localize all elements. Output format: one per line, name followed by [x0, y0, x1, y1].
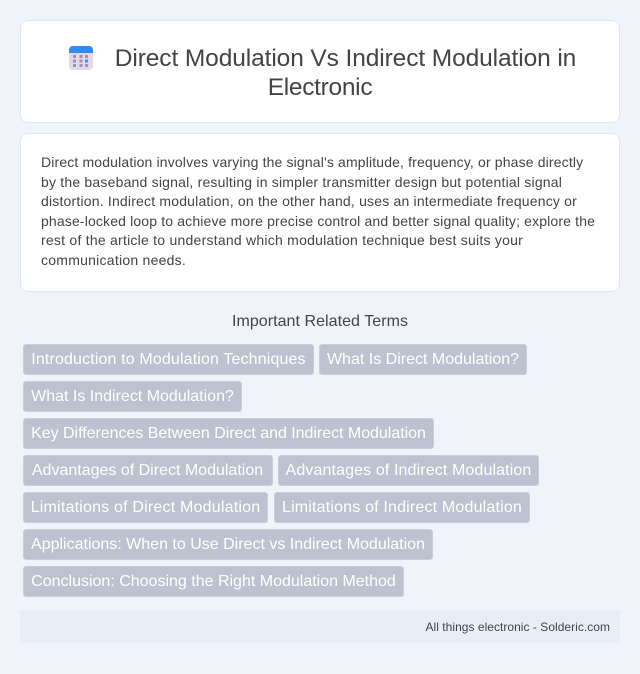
- icon: calendar: [69, 46, 93, 70]
- tag: Conclusion: Choosing the Right Modulation Method: [31, 573, 396, 590]
- tag: [23, 455, 273, 486]
- header card: [20, 20, 620, 123]
- heading: related terms: Important Related Terms: [232, 313, 408, 330]
- summary card: [20, 133, 620, 292]
- summary text: communication needs.: [41, 252, 186, 268]
- title: Electronic: [268, 74, 372, 101]
- tag: [23, 566, 404, 597]
- tag: [23, 492, 268, 523]
- tag: Limitations of Indirect Modulation: [282, 499, 522, 516]
- tag: What Is Direct Modulation?: [327, 351, 519, 368]
- tag: Applications: When to Use Direct vs Indirect Modulation: [31, 536, 425, 553]
- tag: [274, 492, 530, 523]
- footer bar: [20, 610, 620, 643]
- title: Direct Modulation Vs Indirect Modulation in: [115, 45, 576, 72]
- tag: Introduction to Modulation Techniques: [31, 351, 306, 368]
- tag: What Is Indirect Modulation?: [31, 388, 234, 405]
- tag: [23, 344, 314, 375]
- tag: Limitations of Direct Modulation: [31, 499, 260, 516]
- tag: [319, 344, 527, 375]
- title: [115, 45, 576, 101]
- tag: Advantages of Direct Modulation: [32, 462, 263, 479]
- summary text: phase-locked loop to achieve more precise control and better signal quality; explore the: [41, 212, 595, 228]
- tag: [278, 455, 539, 486]
- tag list: [23, 344, 539, 597]
- summary text: Direct modulation involves varying the signal's amplitude, frequency, or phase directly: [41, 154, 583, 170]
- footer text: All things electronic - Solderic.com: [426, 620, 610, 634]
- summary text: rest of the article to understand which modulation technique best suits your: [41, 232, 523, 248]
- summary text: [41, 154, 595, 268]
- tag: [23, 381, 242, 412]
- summary text: by the baseband signal, resulting in simpler transmitter design but potential signal: [41, 174, 562, 190]
- tag: [23, 418, 434, 449]
- tag: [23, 529, 433, 560]
- tag: Key Differences Between Direct and Indirect Modulation: [31, 425, 426, 442]
- tag: Advantages of Indirect Modulation: [286, 462, 531, 479]
- summary text: distortion. Indirect modulation, on the other hand, uses an intermediate frequency or: [41, 193, 577, 209]
